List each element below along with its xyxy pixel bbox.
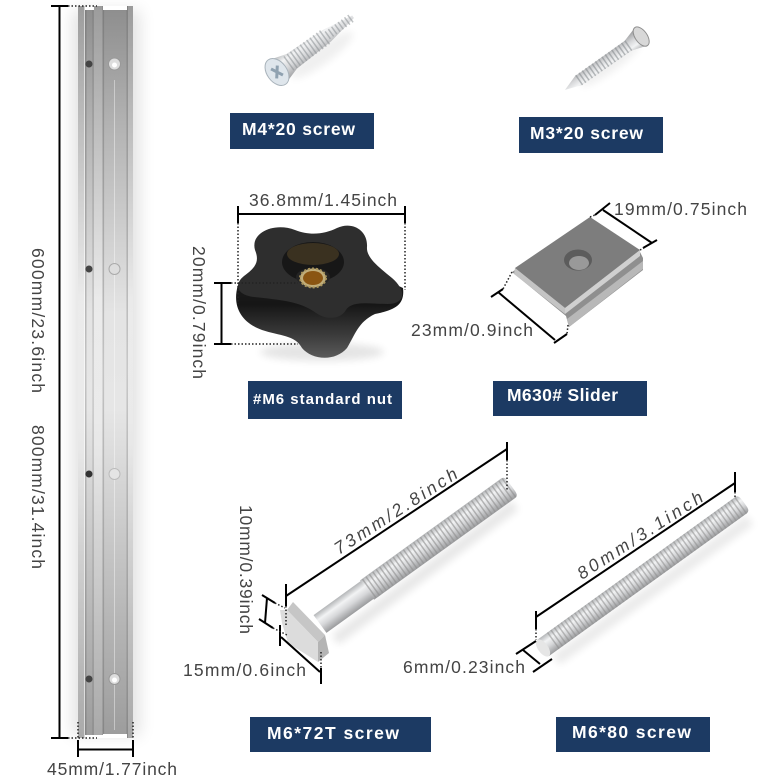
- knob dimensions: [214, 206, 405, 344]
- icon: star knob: [236, 226, 403, 361]
- label: 6mm/0.23inch: 6mm/0.23inch: [403, 657, 525, 677]
- label: 600mm/23.6inch: 600mm/23.6inch: [28, 248, 48, 393]
- label: M3*20 screw: M3*20 screw: [530, 123, 643, 143]
- icon: M6 threaded bolt: [533, 495, 750, 660]
- icon: M3 screw: [559, 24, 652, 99]
- rail width dimension: [78, 722, 133, 757]
- label: 36.8mm/1.45inch: 36.8mm/1.45inch: [249, 190, 397, 210]
- label: M4*20 screw: [230, 113, 374, 149]
- label: 80mm/3.1inch: 80mm/3.1inch: [573, 487, 707, 583]
- icon: M4 screw: [260, 5, 362, 90]
- label: 15mm/0.6inch: 15mm/0.6inch: [183, 660, 306, 680]
- label: 20mm/0.79inch: 20mm/0.79inch: [189, 246, 209, 379]
- label: 800mm/31.4inch: 800mm/31.4inch: [28, 425, 48, 569]
- label: M3*20 screw: [519, 117, 663, 153]
- label: M630# Slider: [493, 381, 647, 416]
- M6 bolt dimensions: [516, 472, 735, 672]
- label: 19mm/0.75inch: 19mm/0.75inch: [614, 199, 747, 219]
- T bolt dimensions: [259, 442, 507, 684]
- rail length dimension line: [51, 6, 97, 738]
- label: M630# Slider: M630# Slider: [507, 385, 618, 405]
- label: 23mm/0.9inch: 23mm/0.9inch: [411, 320, 533, 340]
- label: #M6 standard nut: [248, 381, 402, 419]
- label: M4*20 screw: M4*20 screw: [242, 119, 355, 139]
- label: #M6 standard nut: #M6 standard nut: [253, 391, 392, 408]
- label: 73mm/2.8inch: 73mm/2.8inch: [330, 464, 461, 558]
- label: 45mm/1.77inch: 45mm/1.77inch: [47, 759, 177, 779]
- label: M6*80 screw: [556, 717, 710, 752]
- rail holes: [86, 58, 120, 684]
- label: M6*80 screw: M6*80 screw: [572, 722, 691, 742]
- label: M6*72T screw: [250, 717, 431, 752]
- icon: slider block: [512, 217, 643, 327]
- label: 10mm/0.39inch: 10mm/0.39inch: [236, 505, 256, 634]
- icon: T bolt: [280, 476, 518, 662]
- label: M6*72T screw: M6*72T screw: [267, 723, 399, 743]
- rail: aluminium T-track: [72, 6, 140, 738]
- slider dimensions: [491, 203, 657, 343]
